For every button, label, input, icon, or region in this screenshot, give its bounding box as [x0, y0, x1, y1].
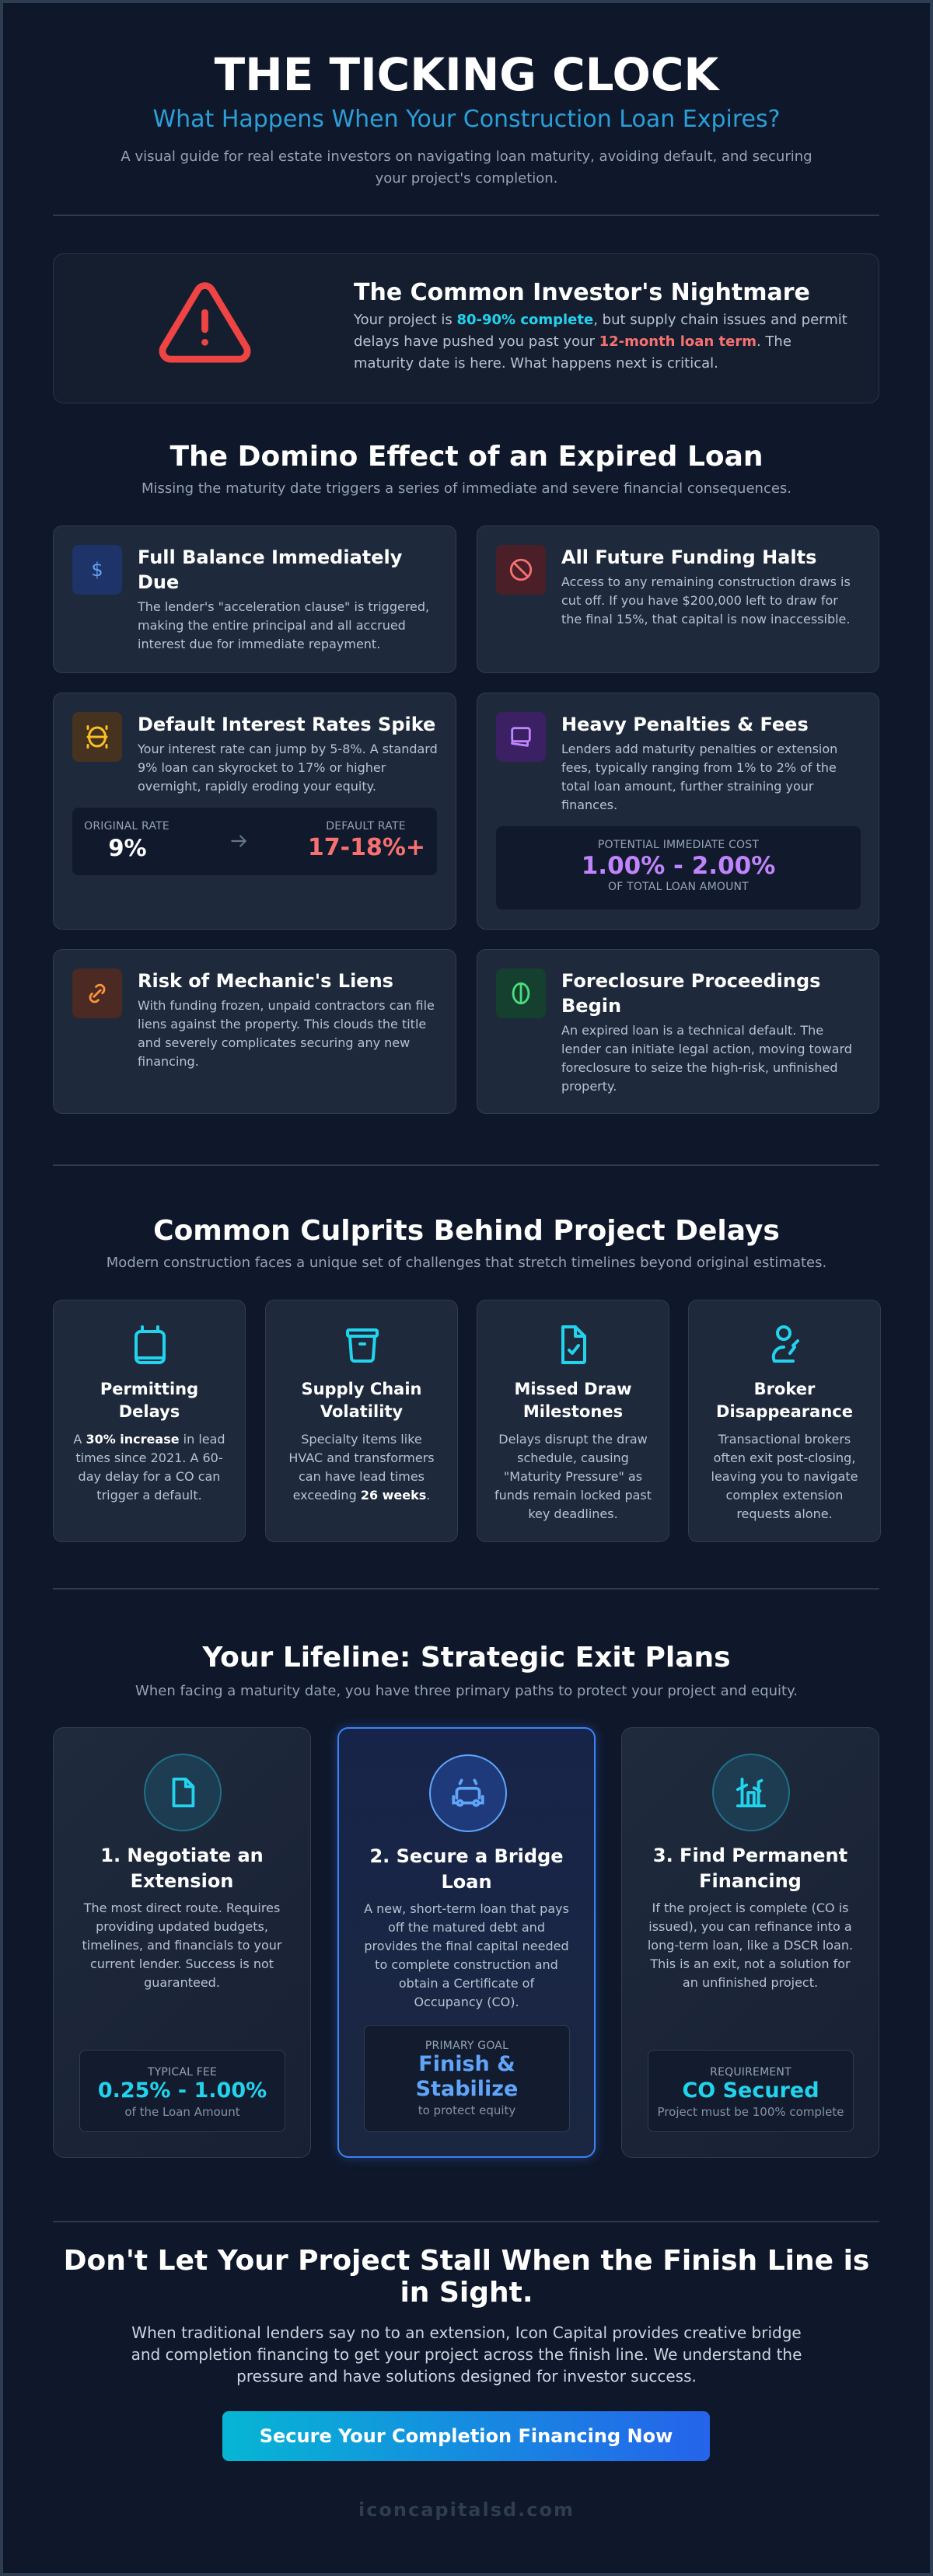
- cost box: 1.00% - 2.00%: [582, 852, 775, 880]
- card: foreclosure: Foreclosure Proceedings: [561, 970, 820, 992]
- culprit: supply chain: Specialty items like HVAC and transformers can have lead times exceeding 26 weeks.: [288, 1432, 435, 1503]
- rate comparison: ORIGINAL RATE: [84, 820, 169, 832]
- card: default rates: [53, 693, 456, 930]
- exit: extension: [53, 1727, 311, 2158]
- title: THE TICKING CLOCK: [215, 48, 718, 101]
- heading: exit plans: Your Lifeline: Strategic Exit Plans: [202, 1642, 731, 1674]
- primary goal box: Finish &: [418, 2052, 515, 2076]
- card: default rates: Default Interest Rates Spike: [138, 714, 435, 735]
- intro text: your project's completion.: [376, 170, 557, 187]
- CTA text: [131, 2323, 802, 2386]
- culprit: permitting: Permitting Delays: [100, 1380, 198, 1421]
- subtitle: What Happens When Your Construction Loan Expires?: [152, 106, 781, 133]
- exit: bridge loan: [337, 1727, 596, 2158]
- requirement box: REQUIREMENT: [710, 2066, 791, 2079]
- card: foreclosure: An expired loan is a technical default. The lender can initiate legal action, moving toward foreclosure to seize the high-risk, unfinished property.: [561, 1023, 852, 1094]
- CTA heading: [64, 2245, 869, 2309]
- nightmare text: Your project is 80-90% complete, but supply chain issues and permit: [354, 312, 847, 328]
- icon: person: [771, 1325, 799, 1363]
- culprit: supply chain: Supply Chain Volatility: [301, 1380, 422, 1421]
- card: default rates: 9% loan can skyrocket to 17% or higher: [138, 760, 386, 775]
- rate comparison: 9%: [108, 835, 147, 861]
- icon: file check: [561, 1325, 586, 1364]
- CTA heading: in Sight.: [400, 2277, 533, 2309]
- CTA text: and completion financing to get your project across the finish line. We understand the: [131, 2345, 802, 2364]
- requirement box: CO Secured: [682, 2079, 819, 2103]
- primary goal box: to protect equity: [418, 2103, 515, 2117]
- primary goal box: [364, 2025, 570, 2132]
- nightmare text: delays have pushed you past your 12-month loan term. The: [354, 333, 791, 350]
- culprit: permitting: A 30% increase in lead times since 2021. A 60-day delay for a CO can trigger a default.: [73, 1432, 225, 1503]
- card: full balance due: [53, 525, 456, 673]
- subheading: culprits: Modern construction faces a unique set of challenges that stretch timelines beyond original estimates.: [107, 1255, 826, 1271]
- icon: ban: [496, 545, 546, 595]
- exit: permanent financing: 3. Find Permanent Financing: [653, 1845, 847, 1892]
- card: foreclosure: Begin: [561, 995, 621, 1017]
- CTA heading: Don't Let Your Project Stall When the Finish Line is: [64, 2245, 869, 2277]
- icon: calendar: [135, 1325, 166, 1364]
- typical fee box: of the Loan Amount: [124, 2105, 240, 2119]
- cost box: OF TOTAL LOAN AMOUNT: [608, 881, 749, 893]
- card: full balance due: Full Balance Immediately: [138, 546, 402, 568]
- requirement box: Project must be 100% complete: [658, 2105, 844, 2119]
- primary goal box: PRIMARY GOAL: [425, 2040, 508, 2052]
- rate comparison: DEFAULT RATE: [326, 820, 406, 832]
- card: default rates: Your interest rate can jump by 5-8%. A standard: [138, 742, 438, 756]
- icon: rate: [72, 712, 122, 762]
- intro text: A visual guide for real estate investors on navigating loan maturity, avoiding default, and securing: [121, 148, 812, 165]
- exit: permanent financing: [621, 1727, 879, 2158]
- arrow: [231, 835, 246, 847]
- culprit: draw milestones: Missed Draw Milestones: [514, 1380, 632, 1421]
- heading: culprits: Common Culprits Behind Project Delays: [153, 1215, 780, 1247]
- cost box: POTENTIAL IMMEDIATE COST: [598, 839, 759, 851]
- nightmare text: maturity date is here. What happens next is critical.: [354, 355, 718, 372]
- culprit: supply chain: [265, 1300, 458, 1542]
- heading: domino effect: The Domino Effect of an Expired Loan: [169, 441, 764, 473]
- icon: penalties: [496, 712, 546, 762]
- icon: foreclosure: [496, 969, 546, 1018]
- typical fee box: TYPICAL FEE: [148, 2066, 217, 2079]
- icon: car: [429, 1754, 507, 1832]
- culprit: broker: Transactional brokers often exit post-closing, leaving you to navigate complex extension requests alone.: [711, 1432, 858, 1521]
- card: foreclosure: [477, 949, 879, 1114]
- culprit: broker: [688, 1300, 881, 1542]
- exit: extension: 1. Negotiate an Extension: [100, 1845, 264, 1892]
- nightmare text: [354, 279, 847, 372]
- CTA text: When traditional lenders say no to an extension, Icon Capital provides creative bridge: [131, 2323, 802, 2342]
- rate comparison: 17-18%+: [308, 834, 425, 861]
- icon: dollar: [72, 545, 122, 595]
- card: mechanic's liens: [53, 949, 456, 1114]
- icon: building: [712, 1754, 790, 1831]
- rate comparison: [72, 808, 437, 875]
- subheading: exit plans: When facing a maturity date, you have three primary paths to protect your project and equity.: [135, 1683, 798, 1699]
- culprit: draw milestones: Delays disrupt the draw schedule, causing "Maturity Pressure" as funds remain locked past key deadlines.: [494, 1432, 652, 1521]
- requirement box: [648, 2050, 854, 2132]
- cost box: [496, 826, 861, 909]
- primary goal box: Stabilize: [416, 2077, 518, 2101]
- exit: bridge loan: 2. Secure a Bridge Loan: [369, 1845, 564, 1893]
- card: full balance due: The lender's "acceleration clause" is triggered, making the entire principal and all accrued interest due for immediate repayment.: [138, 599, 429, 651]
- culprit: permitting: [53, 1300, 246, 1542]
- culprit: broker: Broker Disappearance: [716, 1380, 853, 1421]
- card: penalties: [477, 693, 879, 930]
- culprit: draw milestones: [477, 1300, 669, 1542]
- card: default rates: overnight, rapidly eroding your equity.: [138, 779, 376, 794]
- subheading: domino: Missing the maturity date triggers a series of immediate and severe financial consequences.: [142, 480, 791, 497]
- footer url: iconcapitalsd.com: [358, 2499, 575, 2521]
- icon: box: [346, 1328, 379, 1363]
- nightmare text: The Common Investor's Nightmare: [354, 279, 810, 306]
- card: funding halts: All Future Funding Halts: [561, 546, 816, 568]
- panel: investor nightmare: [53, 253, 879, 403]
- typical fee box: 0.25% - 1.00%: [98, 2079, 267, 2103]
- CTA button: [222, 2411, 710, 2461]
- card: full balance due: Due: [138, 571, 179, 593]
- icon: warning triangle: [159, 282, 250, 362]
- icon: document: [144, 1754, 222, 1831]
- exit: bridge loan: A new, short-term loan that pays off the matured debt and provides the final capital needed to complete construction and obtain a Certificate of Occupancy (CO).: [364, 1901, 569, 2009]
- icon: dollar: $: [91, 559, 103, 581]
- card: penalties: Lenders add maturity penalties or extension fees, typically ranging from 1% to 2% of the total loan amount, further straining your finances.: [561, 742, 837, 812]
- CTA text: pressure and have solutions designed for investor success.: [236, 2367, 697, 2386]
- icon: link: [72, 969, 122, 1018]
- card: mechanic's liens: Risk of Mechanic's Liens: [138, 970, 393, 992]
- exit: permanent financing: If the project is complete (CO is issued), you can refinance into a long-term loan, like a DSCR loan. This is an exit, not a solution for an unfinished project.: [648, 1901, 853, 1990]
- exit: extension: The most direct route. Requires providing updated budgets, timelines, and financials to your current lender. Success is not guaranteed.: [82, 1901, 281, 1990]
- CTA button: Secure Your Completion Financing Now: [260, 2425, 673, 2447]
- card: mechanic's liens: With funding frozen, unpaid contractors can file liens against the property. This clouds the title and severely complicates securing any new financing.: [138, 998, 435, 1069]
- card: funding halts: Access to any remaining construction draws is cut off. If you have $200,000 left to draw for the final 15%, that capital is now inaccessible.: [561, 574, 851, 627]
- card: funding halts: [477, 525, 879, 673]
- typical fee box: [79, 2050, 285, 2132]
- intro text: [121, 148, 812, 187]
- card: penalties: Heavy Penalties & Fees: [561, 714, 809, 735]
